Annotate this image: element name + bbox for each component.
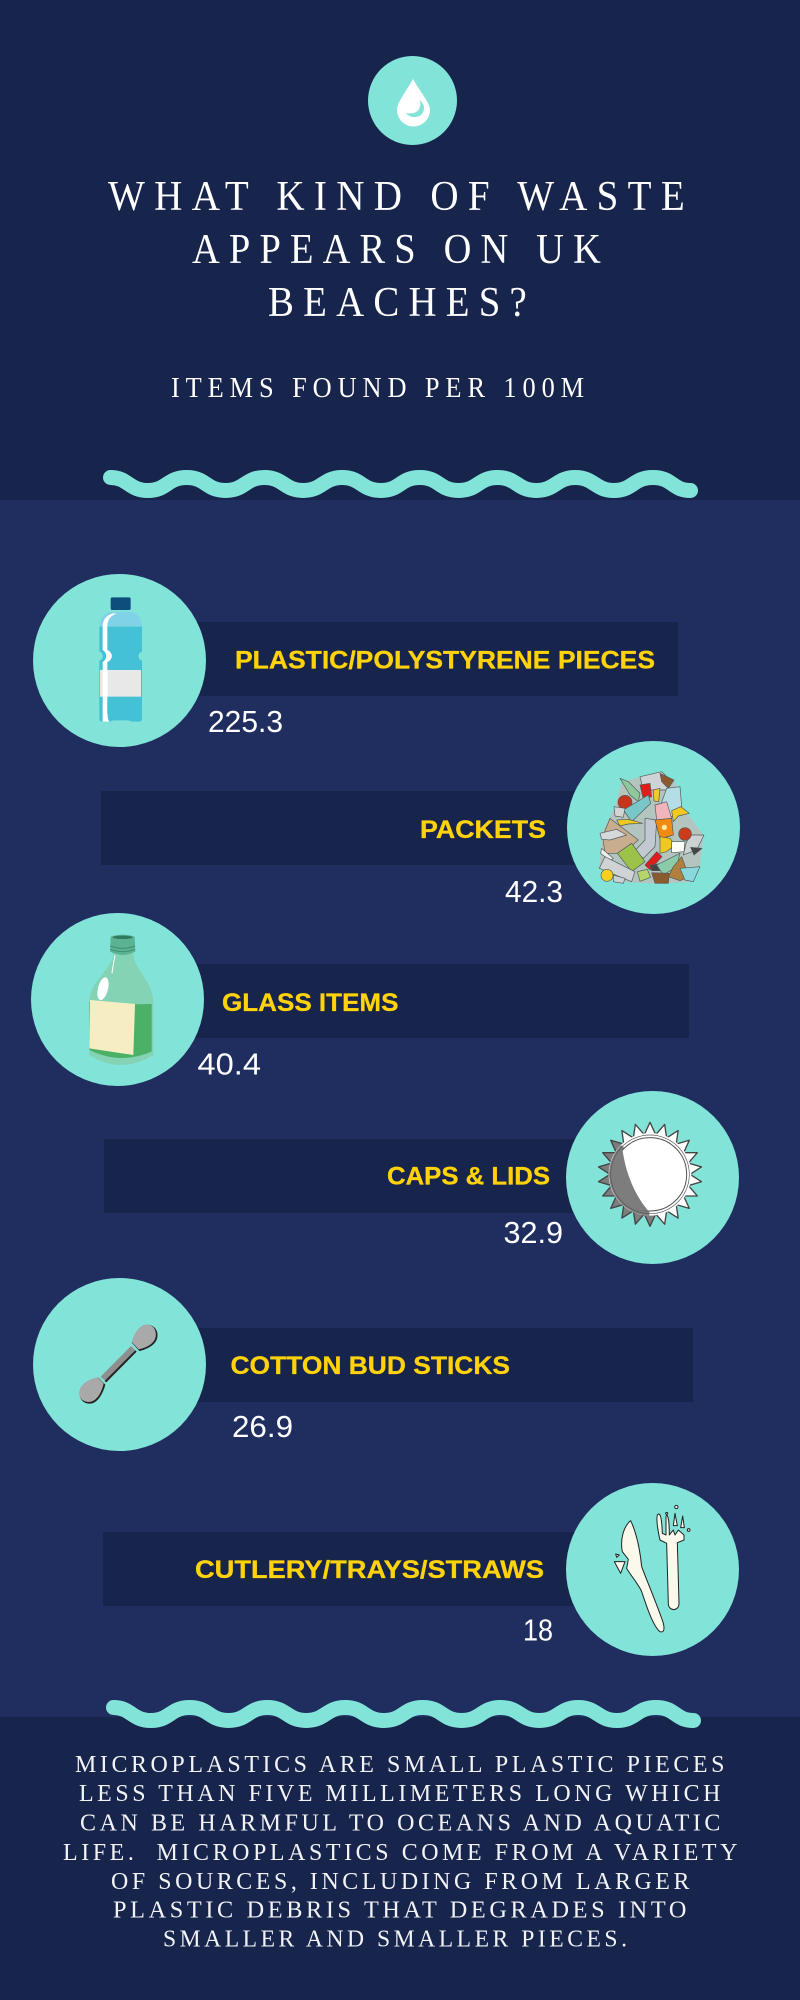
value: 26.9 (232, 1409, 293, 1444)
explanatory text: MICROPLASTICS ARE SMALL PLASTIC PIECES (75, 1752, 728, 1778)
wave divider top (110, 478, 690, 490)
category label: CAPS & LIDS (387, 1162, 550, 1190)
title: BEACHES? (268, 280, 536, 326)
value: 32.9 (504, 1215, 563, 1250)
label bar (101, 791, 581, 865)
category label: GLASS ITEMS (222, 989, 398, 1017)
value: 225.3 (208, 704, 283, 739)
title (108, 174, 694, 326)
label bar (103, 1532, 583, 1606)
category label: COTTON BUD STICKS (230, 1352, 510, 1380)
panel: caps and lids (104, 1091, 739, 1264)
category label: CUTLERY/TRAYS/STRAWS (195, 1556, 544, 1584)
label bar (104, 1139, 584, 1213)
icon: glass bottle (31, 913, 204, 1086)
footer panel (63, 1708, 741, 1952)
explanatory text: SMALLER AND SMALLER PIECES. (163, 1926, 630, 1952)
panel: glass items (31, 913, 689, 1086)
subtitle: ITEMS FOUND PER 100M (171, 372, 590, 404)
value: 40.4 (198, 1046, 261, 1082)
explanatory text: CAN BE HARMFUL TO OCEANS AND AQUATIC (80, 1810, 724, 1836)
explanatory text: LESS THAN FIVE MILLIMETERS LONG WHICH (79, 1781, 724, 1807)
category label: PACKETS (420, 816, 546, 844)
explanatory text: LIFE. MICROPLASTICS COME FROM A VARIETY (63, 1840, 741, 1866)
panel: plastic/polystyrene pieces (33, 574, 678, 747)
label bar (180, 964, 689, 1038)
value: 18 (523, 1612, 553, 1648)
explanatory text (63, 1752, 741, 1952)
category label: PLASTIC/POLYSTYRENE PIECES (235, 646, 655, 674)
label bar (180, 1328, 693, 1402)
panel: packets (101, 741, 740, 914)
header panel (108, 56, 694, 490)
icon: cotton bud (33, 1278, 206, 1451)
title: WHAT KIND OF WASTE (108, 174, 694, 220)
label bar (180, 622, 678, 696)
icon: plastic bottle (33, 574, 206, 747)
icon: broken cutlery (566, 1483, 739, 1656)
panel: cutlery, trays and straws (103, 1483, 739, 1656)
icon: rubbish pile (567, 741, 740, 914)
wave divider bottom (114, 1708, 694, 1720)
explanatory text: OF SOURCES, INCLUDING FROM LARGER (111, 1869, 693, 1895)
value: 42.3 (505, 874, 563, 909)
icon: water drop (368, 56, 457, 145)
explanatory text: PLASTIC DEBRIS THAT DEGRADES INTO (113, 1898, 690, 1924)
panel: cotton bud sticks (33, 1278, 693, 1451)
icon: bottle cap (566, 1091, 739, 1264)
title: APPEARS ON UK (192, 227, 610, 273)
